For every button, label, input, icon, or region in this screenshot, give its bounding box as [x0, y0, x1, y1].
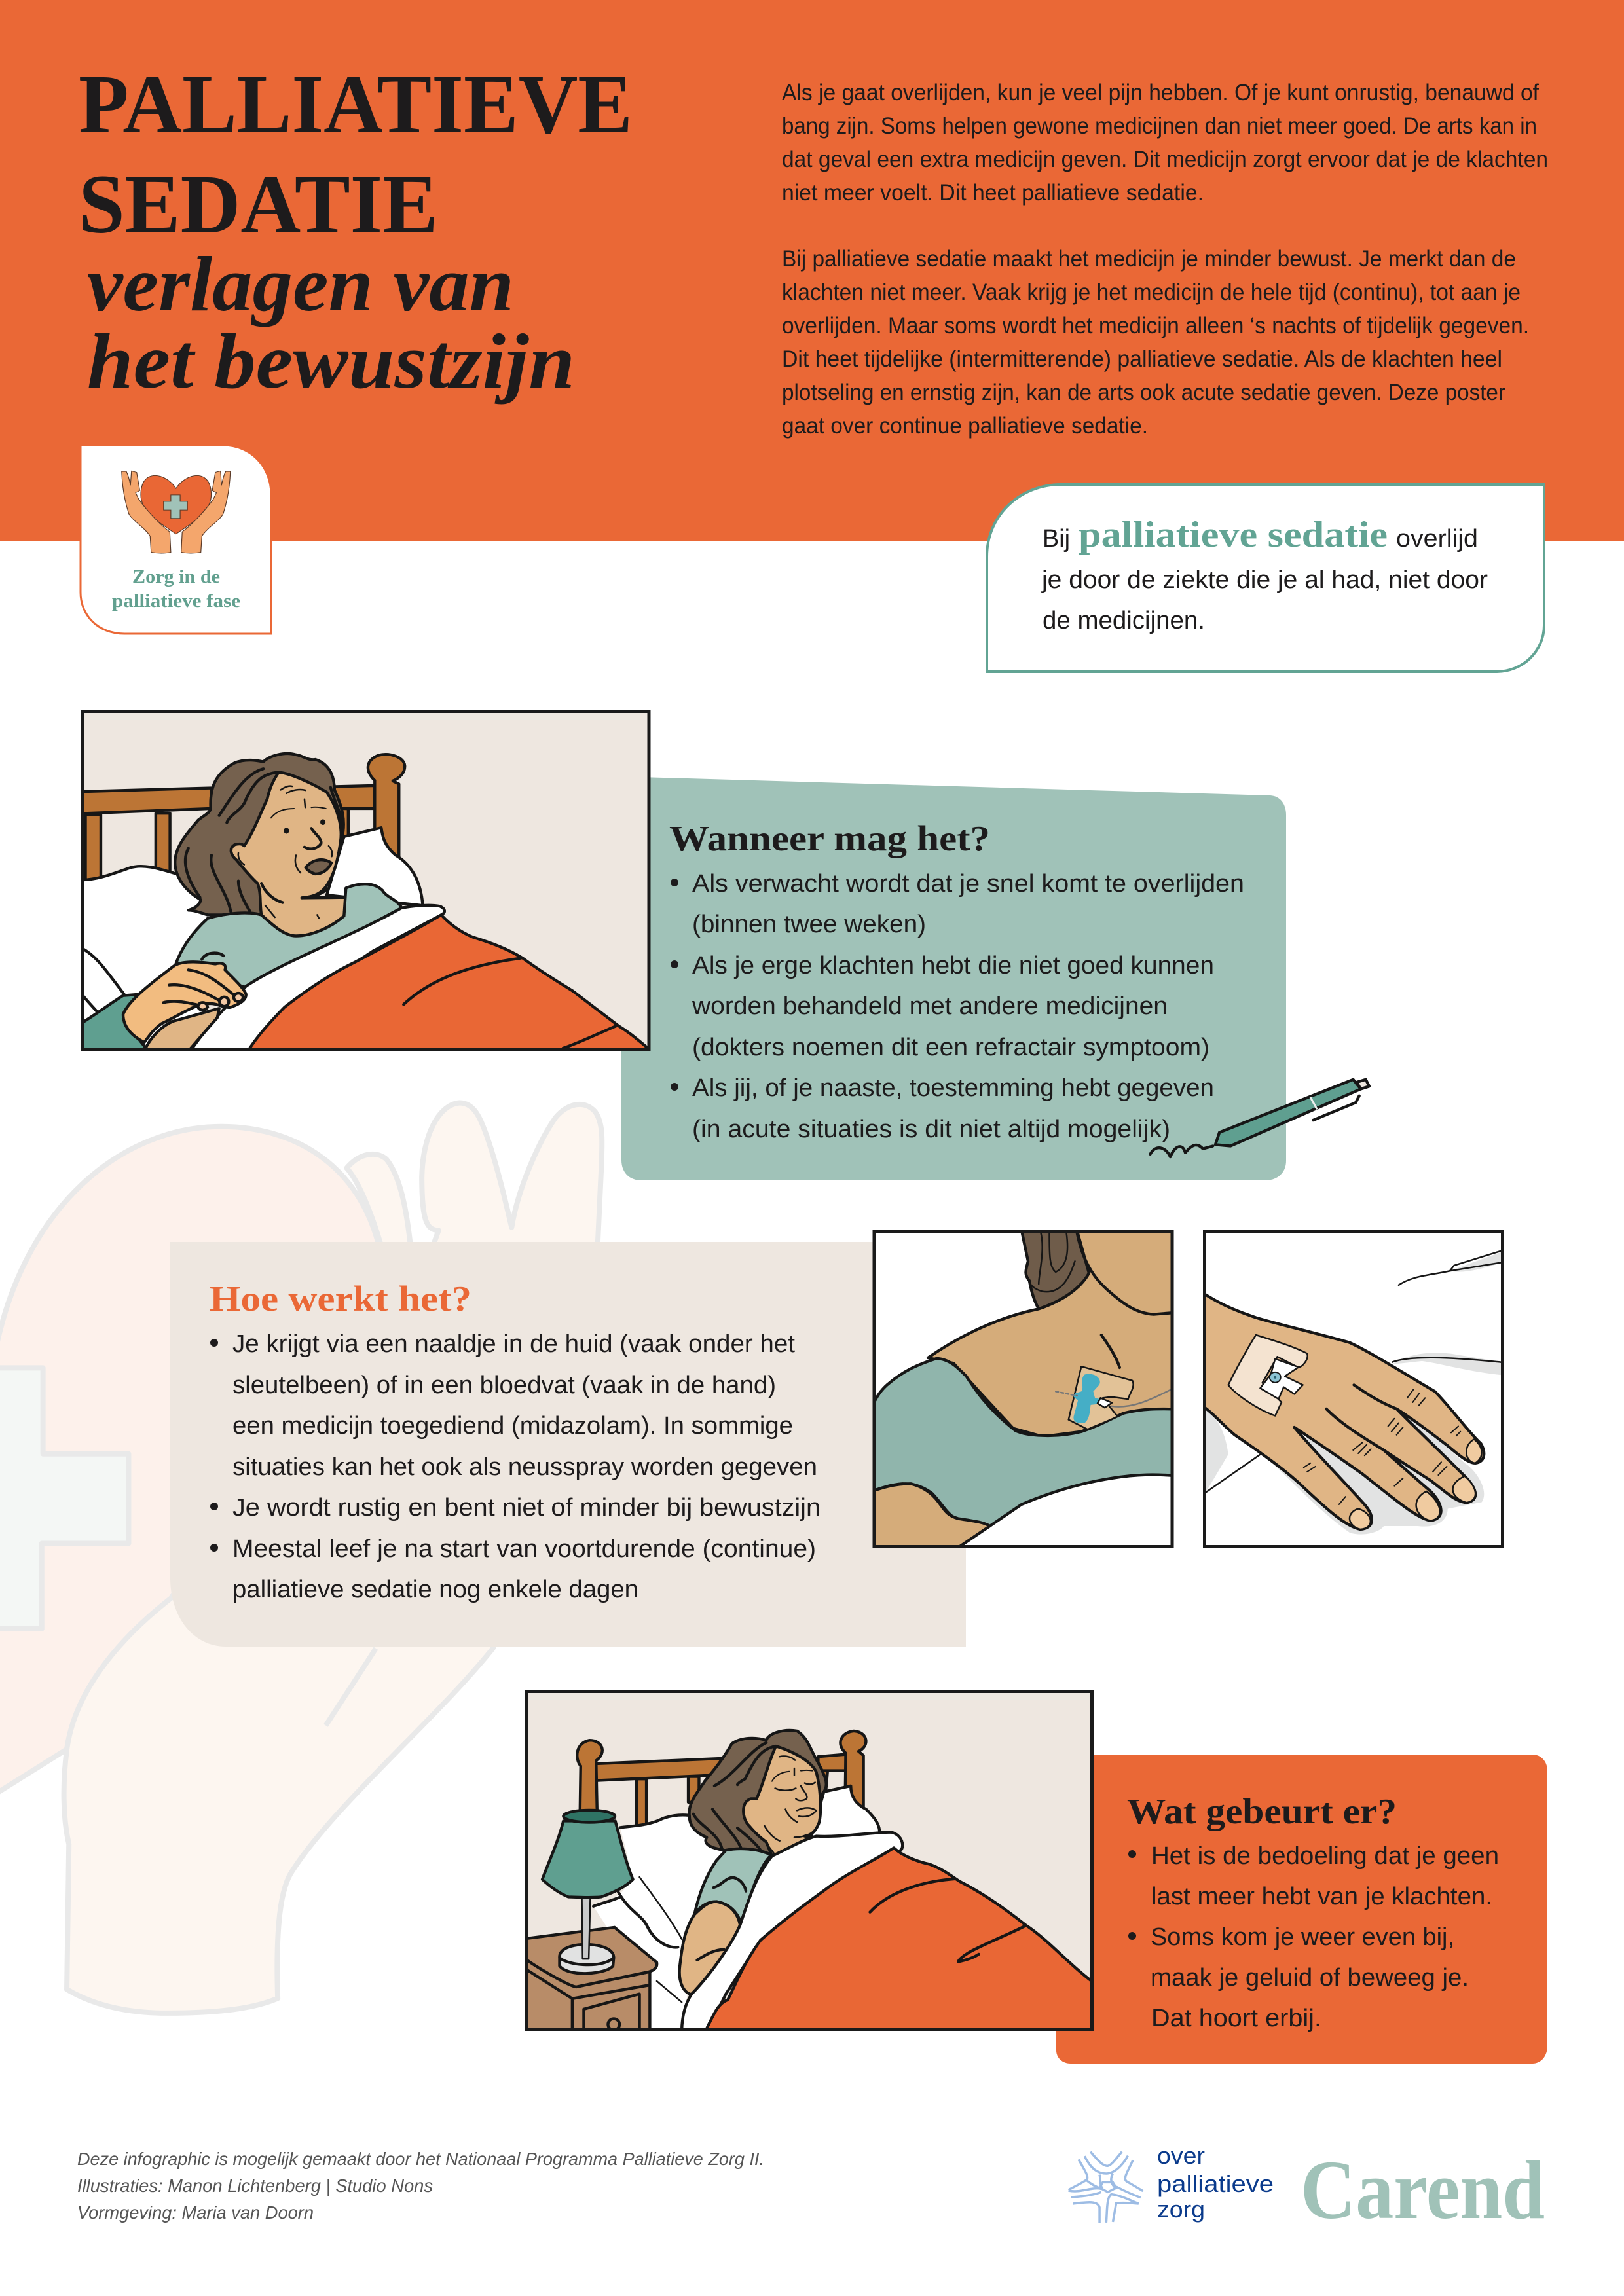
bullet list: Als je erge klachten hebt die niet goed kunnen — [692, 952, 1214, 979]
intro text: dat geval een extra medicijn geven. Dit medicijn zorgt ervoor dat je de klachten — [782, 147, 1548, 172]
intro text: Als je gaat overlijden, kun je veel pijn hebben. Of je kunt onrustig, benauwd of — [782, 80, 1539, 105]
illustration frame — [874, 1232, 1172, 1546]
intro text: Bij palliatieve sedatie maakt het medicijn je minder bewust. Je merkt dan de — [782, 246, 1516, 272]
bedside table — [523, 1927, 657, 2033]
bullet list: palliatieve sedatie nog enkele dagen — [232, 1576, 638, 1603]
logo: over palliatieve zorg star — [1069, 2152, 1143, 2223]
bullet list: Soms kom je weer even bij, — [1151, 1923, 1454, 1951]
hair — [689, 1730, 826, 1853]
finger knuckle lines — [1354, 1385, 1397, 1409]
red blanket — [248, 915, 652, 1051]
intro text — [782, 80, 1548, 439]
background watermark: hands holding heart — [0, 1103, 602, 2013]
bullet list: worden behandeld met andere medicijnen — [692, 993, 1168, 1020]
logo: over palliatieve zorg wordmark — [1157, 2142, 1274, 2223]
bullet list — [1128, 1842, 1499, 2032]
footer credits — [77, 2149, 764, 2223]
icon: pen with scribble — [1151, 1080, 1369, 1157]
illustration: worried woman in bed — [77, 710, 652, 1051]
bullet list: (dokters noemen dit een refractair symptoom) — [692, 1034, 1209, 1061]
intro text: niet meer voelt. Dit heet palliatieve sedatie. — [782, 180, 1204, 206]
intro text: gaat over continue palliatieve sedatie. — [782, 413, 1148, 439]
logo caption: palliatieve fase — [112, 591, 240, 611]
heading: Wat gebeurt er? — [1127, 1791, 1397, 1831]
heading: Hoe werkt het? — [210, 1279, 471, 1319]
title — [79, 58, 633, 405]
bullet list: (binnen twee weken) — [692, 911, 926, 938]
headboard — [577, 1731, 866, 1826]
logo: over palliatieve zorg wordmark: palliatieve — [1157, 2170, 1274, 2197]
patch and needle — [1228, 1335, 1308, 1416]
intro text: klachten niet meer. Vaak krijg je het medicijn de hele tijd (continu), tot aan je — [782, 280, 1521, 305]
bullet list: Het is de bedoeling dat je geen — [1151, 1842, 1499, 1870]
callout: palliatieve sedatie: Bij — [1043, 525, 1070, 553]
hair — [175, 754, 344, 915]
illustration frame — [1205, 1232, 1502, 1546]
icon: hands holding heart — [122, 471, 231, 553]
title: SEDATIE — [79, 158, 438, 251]
bullet list: (in acute situaties is dit niet altijd mogelijk) — [692, 1116, 1170, 1143]
white sheet fold — [191, 905, 445, 1051]
heading: Wanneer mag het? — [669, 818, 990, 858]
bullet list: sleutelbeen) of in een bloedvat (vaak in de hand) — [232, 1372, 776, 1399]
bullet list: Meestal leef je na start van voortdurende (continue) — [232, 1535, 816, 1563]
bullet list: een medicijn toegediend (midazolam). In sommige — [232, 1412, 793, 1440]
logo: over palliatieve zorg wordmark: over — [1157, 2142, 1205, 2169]
hand and sleeve — [77, 953, 246, 1051]
illustration: needle on back of hand — [1206, 1250, 1501, 1535]
teal sleeve — [694, 1849, 771, 1924]
panel: hoe werkt het — [170, 1242, 966, 1647]
logo caption: Zorg in de — [132, 566, 220, 587]
illustration frame — [526, 1692, 1092, 2030]
title: PALLIATIEVE — [79, 58, 633, 151]
bullet list — [210, 1330, 821, 1603]
bullet list: situaties kan het ook als neusspray worden gegeven — [232, 1453, 817, 1481]
hair strands and facial features — [185, 769, 343, 919]
panel: wanneer mag het — [621, 777, 1286, 1180]
hand — [1200, 1292, 1484, 1529]
teal pyjama top — [175, 884, 401, 989]
bullet list: maak je geluid of beweeg je. — [1151, 1964, 1469, 1992]
bullet list: Dat hoort erbij. — [1151, 2005, 1321, 2032]
headboard — [77, 754, 405, 881]
bullet list: last meer hebt van je klachten. — [1151, 1883, 1492, 1910]
footer credits: Deze infographic is mogelijk gemaakt door het Nationaal Programma Palliatieve Zorg II. — [77, 2149, 764, 2169]
hair strands and facial features — [693, 1743, 816, 1855]
pillows and bedding — [77, 828, 423, 1051]
pillows and bedding — [593, 1786, 879, 2033]
arm — [680, 1902, 740, 1994]
face — [743, 1746, 821, 1856]
logo: over palliatieve zorg wordmark: zorg — [1157, 2196, 1205, 2223]
illustration: sleeping woman in bed — [523, 1690, 1095, 2033]
nails — [1466, 1439, 1482, 1463]
footer credits: Vormgeving: Maria van Doorn — [77, 2202, 314, 2223]
bullet list: Als jij, of je naaste, toestemming hebt gegeven — [692, 1074, 1214, 1102]
lamp — [542, 1810, 633, 1973]
title: het bewustzijn — [87, 318, 575, 405]
sheet shadows — [1206, 1409, 1228, 1493]
intro text: bang zijn. Soms helpen gewone medicijnen dan niet meer goed. De arts kan in — [782, 113, 1537, 139]
orange header band — [0, 0, 1624, 541]
title: verlagen van — [87, 240, 514, 327]
bullet list: Als verwacht wordt dat je snel komt te overlijden — [692, 870, 1244, 898]
bullet list: Je wordt rustig en bent niet of minder bij bewustzijn — [232, 1494, 821, 1522]
logo card: zorg in de palliatieve fase — [81, 445, 271, 634]
intro text: overlijden. Maar soms wordt het medicijn alleen ‘s nachts of tijdelijk gegeven. — [782, 313, 1529, 338]
white sheet — [682, 1832, 902, 2033]
bullet list: Je krijgt via een naaldje in de huid (vaak onder het — [232, 1330, 795, 1358]
callout: palliatieve sedatie: de medicijnen. — [1043, 607, 1205, 634]
callout: palliatieve sedatie: je door de ziekte die je al had, niet door — [1041, 566, 1488, 594]
callout: palliatieve sedatie: palliatieve sedatie — [1079, 515, 1388, 555]
callout: palliatieve sedatie — [987, 484, 1544, 672]
intro text: Dit heet tijdelijke (intermitterende) palliatieve sedatie. Als de klachten heel — [782, 346, 1502, 372]
panel: wat gebeurt er — [1056, 1755, 1547, 2064]
red blanket — [705, 1848, 1095, 2033]
logo caption — [112, 566, 240, 611]
face and neck — [231, 773, 346, 936]
intro text: plotseling en ernstig zijn, kan de arts ook acute sedatie geven. Deze poster — [782, 380, 1505, 405]
illustration: butterfly needle under collarbone — [868, 1230, 1179, 1548]
footer credits: Illustraties: Manon Lichtenberg | Studio Nons — [77, 2176, 433, 2196]
illustration frame — [83, 711, 649, 1049]
bullet list — [671, 870, 1244, 1143]
callout: palliatieve sedatie: overlijd — [1396, 525, 1478, 553]
logo: Carend: Carend — [1301, 2143, 1545, 2236]
